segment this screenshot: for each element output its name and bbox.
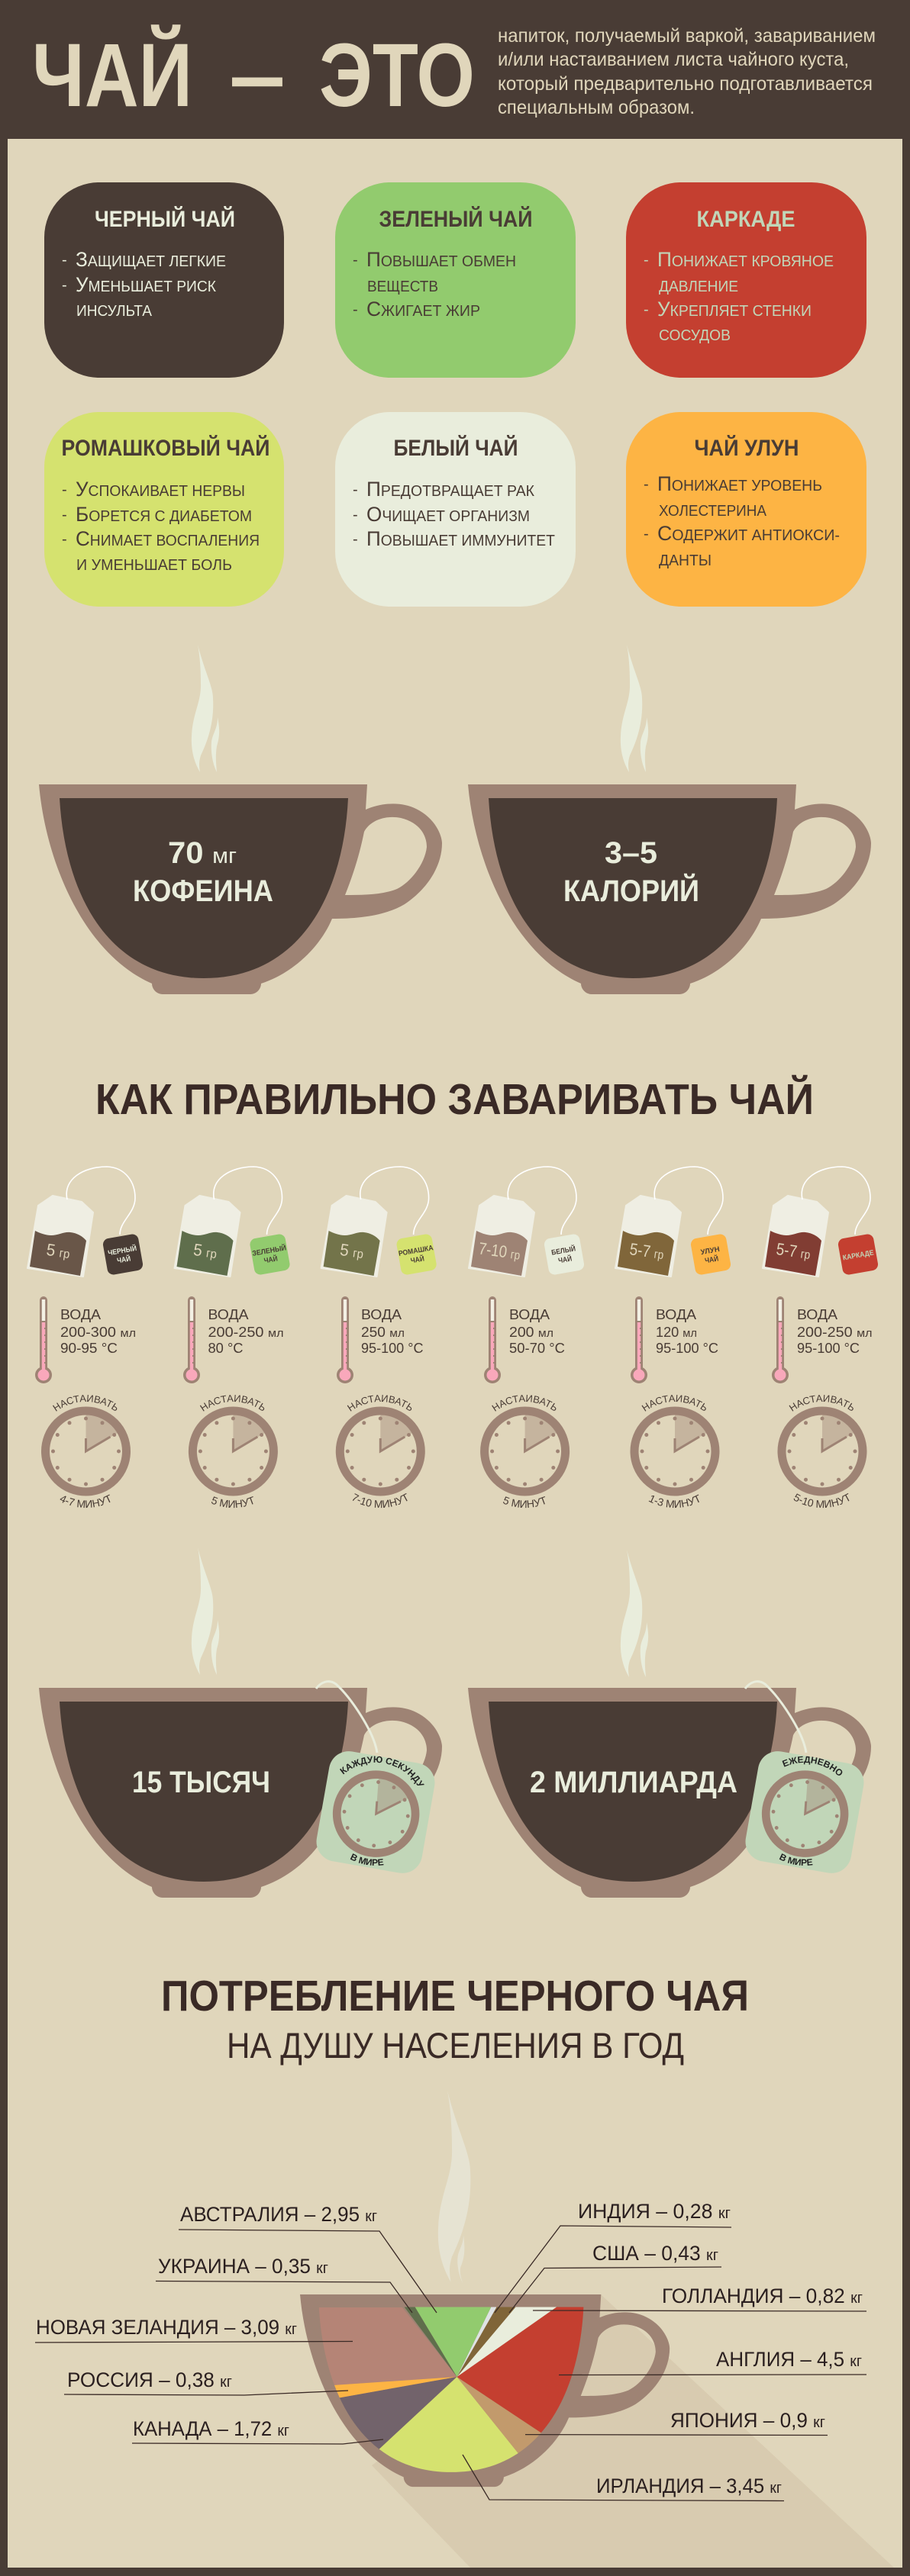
- label: Russia: РОССИЯ – 0,38 кг: [67, 2368, 232, 2391]
- panel: green tea card: ВЕЩЕСТВ: [367, 279, 438, 295]
- panel: black tea card: ИНСУЛЬТА: [76, 303, 153, 320]
- panel: chamomile card: -: [62, 481, 67, 498]
- tag with clock: daily: ЕЖЕДНЕВНО: [782, 1757, 843, 1776]
- tea bag: green: [174, 1167, 291, 1277]
- panel: hibiscus card: КАРКАДЕ: [696, 207, 795, 232]
- water info column 1: [35, 1296, 136, 1383]
- panel: oolong card: ХОЛЕСТЕРИНА: [659, 503, 767, 520]
- water info column 4: [484, 1296, 565, 1383]
- clock column 6: 5-10 МИНУТ: [794, 1492, 849, 1508]
- water info column 2: [183, 1296, 284, 1383]
- tea bag: black: 5 гр: [45, 1240, 72, 1262]
- clock column 2: НАСТАИВАТЬ: [200, 1395, 264, 1412]
- tea bag: chamomile: ЧАЙ: [410, 1254, 425, 1265]
- tea bag: oolong: УЛУН: [700, 1245, 721, 1257]
- cup: caffeine: 70 мг: [168, 836, 237, 870]
- panel: green tea card: -: [353, 301, 358, 318]
- label: Japan: ЯПОНИЯ – 0,9 кг: [670, 2409, 825, 2432]
- panel: hibiscus card: ДАВЛЕНИЕ: [659, 279, 738, 295]
- panel: green tea card: [335, 182, 576, 378]
- clock column 4: [480, 1395, 570, 1508]
- label: Canada: КАНАДА – 1,72 кг: [133, 2417, 289, 2440]
- label: USA: США – 0,43 кг: [592, 2242, 718, 2265]
- label: Ukraine: УКРАИНА – 0,35 кг: [158, 2255, 328, 2278]
- panel: black tea card: ЗАЩИЩАЕТ ЛЕГКИЕ: [76, 248, 226, 271]
- water info column 3: 250 мл: [361, 1324, 405, 1340]
- panel: green tea card: ЗЕЛЕНЫЙ ЧАЙ: [379, 206, 533, 232]
- panel: hibiscus card: СОСУДОВ: [659, 327, 731, 344]
- panel: black tea card: [44, 182, 284, 378]
- panel: white tea card: [335, 412, 576, 607]
- water info column 6: 200-250 мл: [797, 1324, 872, 1340]
- panel: chamomile card: СНИМАЕТ ВОСПАЛЕНИЯ: [76, 527, 260, 550]
- panel: oolong card: -: [644, 526, 649, 543]
- header definition text: который предварительно подготавливается: [498, 73, 873, 95]
- label: England: АНГЛИЯ – 4,5 кг: [716, 2348, 862, 2371]
- clock column 6: [777, 1395, 867, 1508]
- tea bag: white: БЕЛЫЙ: [550, 1244, 576, 1257]
- water info column 1: ВОДА: [60, 1306, 102, 1322]
- water info column 1: 90-95 °С: [60, 1340, 118, 1356]
- clock column 1: 4-7 МИНУТ: [60, 1494, 110, 1508]
- tea bag: white: ЧАЙ: [557, 1254, 573, 1265]
- cup: calories: КАЛОРИЙ: [563, 873, 699, 908]
- title: ЧАЙ: [32, 24, 192, 126]
- label: Holland: ГОЛЛАНДИЯ – 0,82 кг: [662, 2285, 863, 2307]
- clock column 4: НАСТАИВАТЬ: [492, 1395, 556, 1412]
- water info column 5: 120 мл: [656, 1324, 697, 1340]
- panel: green tea card: -: [353, 252, 358, 269]
- label: India: ИНДИЯ – 0,28 кг: [578, 2200, 731, 2223]
- heading: brewing: КАК ПРАВИЛЬНО ЗАВАРИВАТЬ ЧАЙ: [95, 1074, 814, 1124]
- panel: hibiscus card: -: [644, 252, 649, 269]
- water info column 5: [631, 1296, 718, 1383]
- label: Ireland: ИРЛАНДИЯ – 3,45 кг: [596, 2475, 782, 2497]
- clock column 6: НАСТАИВАТЬ: [789, 1395, 854, 1412]
- panel: white tea card: БЕЛЫЙ ЧАЙ: [394, 435, 518, 461]
- tag with clock: every second: [316, 1751, 435, 1873]
- water info column 6: 95-100 °С: [797, 1340, 860, 1356]
- title: –: [229, 25, 286, 126]
- panel: chamomile card: УСПОКАИВАЕТ НЕРВЫ: [76, 478, 245, 501]
- cup: caffeine: [39, 645, 442, 994]
- panel: black tea card: -: [62, 252, 67, 269]
- cup: calories: 3–5: [605, 836, 657, 870]
- clock column 5: [631, 1395, 719, 1508]
- tea bag: hibiscus: 5-7 гр: [775, 1239, 812, 1263]
- water info column 5: ВОДА: [656, 1306, 697, 1322]
- water info column 4: 200 мл: [509, 1324, 553, 1340]
- pie chart slices: [319, 2307, 583, 2472]
- panel: oolong card: ЧАЙ УЛУН: [695, 435, 799, 461]
- water info column 6: ВОДА: [797, 1306, 838, 1322]
- clock column 2: [188, 1395, 278, 1508]
- label: Russia: [64, 2368, 348, 2395]
- tea bag: green: ЗЕЛЕНЫЙ: [251, 1243, 287, 1258]
- subheading: per capita per year: НА ДУШУ НАСЕЛЕНИЯ В ГОД: [227, 2025, 684, 2066]
- clock column 3: НАСТАИВАТЬ: [347, 1395, 412, 1412]
- header definition text: специальным образом.: [498, 97, 695, 118]
- cup: caffeine: КОФЕИНА: [133, 874, 273, 908]
- label: Australia: [179, 2203, 437, 2313]
- clock column 1: [41, 1395, 131, 1508]
- long cup shadow: [372, 2294, 894, 2568]
- panel: green tea card: ПОВЫШАЕТ ОБМЕН: [366, 248, 516, 271]
- tag with clock: daily: В МИРЕ: [779, 1853, 812, 1866]
- panel: chamomile card: И УМЕНЬШАЕТ БОЛЬ: [76, 557, 232, 574]
- panel: oolong card: СОДЕРЖИТ АНТИОКСИ-: [657, 522, 840, 545]
- panel: white tea card: -: [353, 481, 358, 498]
- water info column 5: 95-100 °С: [656, 1340, 718, 1356]
- tea bag: white: 7-10 гр: [477, 1238, 521, 1264]
- panel: chamomile card: -: [62, 507, 67, 523]
- tea bag: green: 5 гр: [192, 1240, 218, 1262]
- panel: white tea card: -: [353, 531, 358, 548]
- header: [32, 24, 876, 126]
- panel: black tea card: ЧЕРНЫЙ ЧАЙ: [95, 206, 235, 232]
- water info column 3: 95-100 °С: [361, 1340, 423, 1356]
- clock column 4: 5 МИНУТ: [503, 1496, 545, 1508]
- label: Ukraine: [156, 2255, 412, 2313]
- cup: 15 thousand every second: [39, 1549, 442, 1898]
- water info column 6: [772, 1296, 872, 1383]
- title: ЭТО: [319, 25, 475, 126]
- label: India: [495, 2200, 731, 2313]
- panel: hibiscus card: УКРЕПЛЯЕТ СТЕНКИ: [657, 298, 812, 320]
- tea bag: chamomile: РОМАШКА: [398, 1244, 434, 1258]
- water info column 4: 50-70 °С: [509, 1340, 565, 1356]
- pie chart cup: [282, 2294, 670, 2491]
- tea bag: black: ЧЕРНЫЙ: [107, 1244, 137, 1257]
- tea bag: green: ЧАЙ: [263, 1254, 279, 1265]
- clock column 5: НАСТАИВАТЬ: [641, 1395, 706, 1412]
- panel: hibiscus card: [626, 182, 866, 378]
- clock column 3: 7-10 МИНУТ: [353, 1492, 408, 1508]
- panel: black tea card: УМЕНЬШАЕТ РИСК: [76, 273, 216, 296]
- panel: green tea card: СЖИГАЕТ ЖИР: [366, 298, 480, 320]
- panel: oolong card: ДАНТЫ: [659, 552, 712, 569]
- panel: hibiscus card: ПОНИЖАЕТ КРОВЯНОЕ: [657, 248, 834, 271]
- panel: black tea card: -: [62, 277, 67, 294]
- tag with clock: daily: [745, 1751, 864, 1873]
- panel: hibiscus card: -: [644, 301, 649, 318]
- label: New Zealand: НОВАЯ ЗЕЛАНДИЯ – 3,09 кг: [36, 2316, 297, 2339]
- panel: chamomile card: [44, 412, 284, 607]
- water info column 4: ВОДА: [509, 1306, 550, 1322]
- header definition text: и/или настаиванием листа чайного куста,: [498, 49, 849, 70]
- panel: oolong card: ПОНИЖАЕТ УРОВЕНЬ: [657, 472, 822, 495]
- clock column 2: 5 МИНУТ: [211, 1496, 253, 1508]
- clock column 5: 1-3 МИНУТ: [649, 1494, 699, 1508]
- panel: chamomile card: -: [62, 531, 67, 548]
- tea bag: chamomile: [321, 1167, 437, 1277]
- label: Australia: АВСТРАЛИЯ – 2,95 кг: [180, 2203, 377, 2226]
- tea bag: oolong: 5-7 гр: [628, 1239, 665, 1263]
- tag with clock: every second: КАЖДУЮ СЕКУНДУ: [340, 1757, 424, 1785]
- tea bag: chamomile: 5 гр: [339, 1240, 365, 1262]
- tea bag: black: ЧАЙ: [116, 1254, 131, 1265]
- title: [32, 24, 475, 126]
- clock column 1: НАСТАИВАТЬ: [53, 1395, 118, 1412]
- header definition text: [498, 25, 876, 118]
- panel: oolong card: [626, 412, 866, 607]
- water info column 2: ВОДА: [208, 1306, 249, 1322]
- water info column 1: 200-300 мл: [60, 1324, 136, 1340]
- water info column 3: [337, 1296, 423, 1383]
- panel: white tea card: ПОВЫШАЕТ ИММУНИТЕТ: [366, 527, 555, 550]
- panel: white tea card: ОЧИЩАЕТ ОРГАНИЗМ: [366, 503, 530, 526]
- tea bag: black: [27, 1167, 144, 1277]
- tea bag: white: [469, 1167, 585, 1277]
- tea bag: oolong: [615, 1167, 731, 1277]
- panel: white tea card: ПРЕДОТВРАЩАЕТ РАК: [366, 478, 534, 501]
- cup: 2 billion daily: 2 МИЛЛИАРДА: [530, 1766, 737, 1799]
- tea bag: hibiscus: [763, 1167, 879, 1277]
- water info column 3: ВОДА: [361, 1306, 402, 1322]
- label: USA: [509, 2242, 721, 2313]
- water info column 2: 200-250 мл: [208, 1324, 284, 1340]
- heading: consumption: ПОТРЕБЛЕНИЕ ЧЕРНОГО ЧАЯ: [161, 1972, 749, 2021]
- cup: calories: [468, 645, 871, 994]
- panel: white tea card: -: [353, 507, 358, 523]
- label: Ireland: [463, 2455, 784, 2501]
- header definition text: напиток, получаемый варкой, завариванием: [498, 25, 876, 47]
- panel: oolong card: -: [644, 476, 649, 493]
- tag with clock: every second: В МИРЕ: [350, 1853, 383, 1866]
- clock column 3: [336, 1395, 425, 1508]
- cup: 2 billion daily: [468, 1550, 871, 1898]
- tea bag: hibiscus: КАРКАДЕ: [842, 1249, 874, 1262]
- panel: chamomile card: РОМАШКОВЫЙ ЧАЙ: [61, 435, 270, 461]
- tea bag: oolong: ЧАЙ: [704, 1254, 719, 1265]
- panel: chamomile card: БОРЕТСЯ С ДИАБЕТОМ: [76, 503, 252, 526]
- cup: 15 thousand every second: 15 ТЫСЯЧ: [132, 1766, 270, 1799]
- label: Canada: [132, 2417, 383, 2444]
- steam: pie cup: [438, 2091, 470, 2283]
- water info column 2: 80 °С: [208, 1340, 243, 1356]
